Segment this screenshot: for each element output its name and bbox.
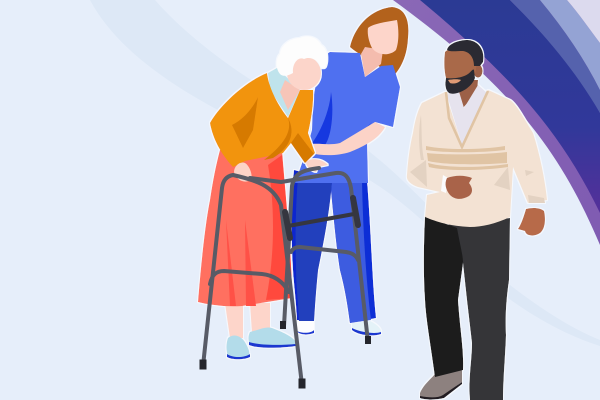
sweater shadow — [232, 97, 258, 148]
man hair — [447, 40, 483, 66]
sweater folds — [410, 115, 510, 190]
woman sweater — [210, 73, 315, 167]
walker dark sleeves and tips — [285, 212, 290, 238]
nurse back leg — [330, 180, 376, 323]
nurse shoes — [296, 321, 314, 334]
woman scarf — [268, 68, 300, 117]
woman legs — [225, 303, 243, 338]
nurse front leg — [292, 170, 332, 321]
man trousers — [445, 218, 510, 400]
walker — [203, 168, 368, 385]
walker front frame — [203, 175, 302, 385]
man hands — [446, 176, 472, 199]
man beard — [445, 69, 475, 94]
figure: nurse — [292, 7, 408, 335]
man shirt — [447, 85, 487, 145]
man neck — [452, 80, 478, 108]
woman face — [280, 80, 300, 110]
woman skirt — [198, 150, 292, 306]
sweater collar and stripes — [446, 91, 488, 147]
walker back frame — [284, 168, 319, 326]
nurse hair — [350, 7, 408, 80]
figure: man — [407, 40, 547, 400]
nurse arm and hand — [307, 122, 385, 155]
man cuffs — [441, 175, 448, 193]
man shoes — [420, 370, 462, 398]
woman hair — [277, 36, 327, 76]
man sweater — [407, 90, 547, 227]
woman shoes — [226, 336, 249, 357]
nurse scrub top — [295, 52, 400, 183]
man ear — [474, 64, 482, 78]
nurse neck and face — [361, 47, 383, 77]
woman hands — [234, 163, 252, 182]
decorative arcs: top right — [393, 0, 600, 245]
man face — [444, 47, 476, 85]
figure: older woman — [198, 36, 328, 359]
